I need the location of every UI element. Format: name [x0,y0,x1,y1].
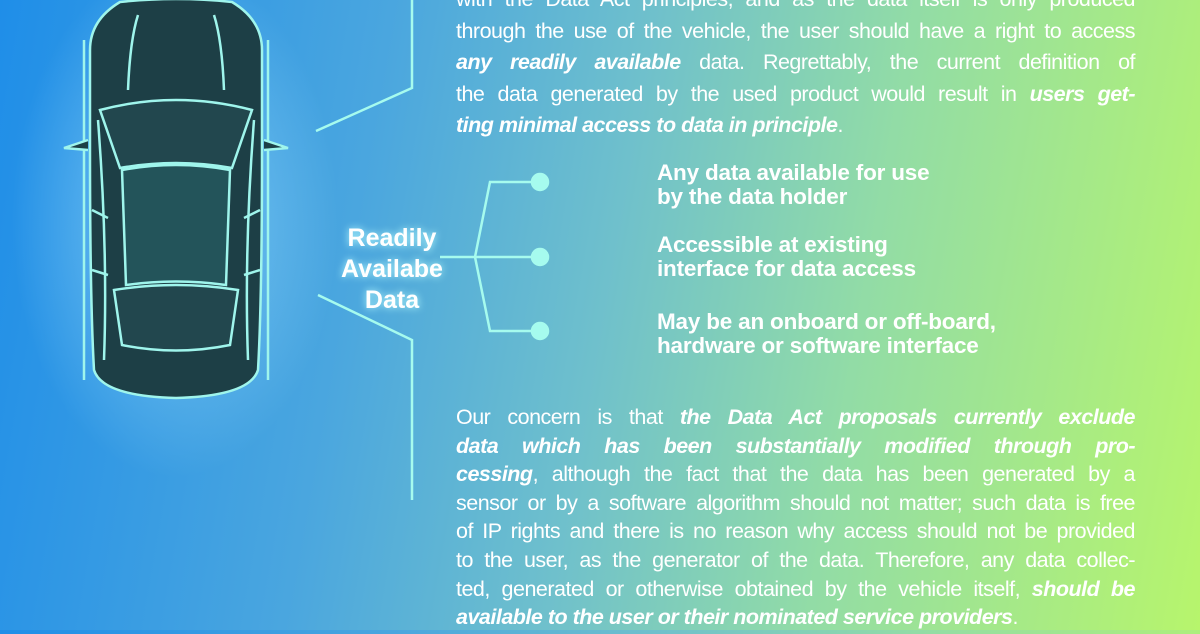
item 1: by the data holder [657,184,847,209]
heading: readily available data: Data [365,286,419,314]
bottom paragraph: available to the user or their nominated service providers. [456,605,1018,629]
item 3 [657,309,996,358]
bottom paragraph: of IP rights and there is no reason why access should not be provided [456,519,1135,543]
glow behind car [10,0,340,480]
bottom paragraph [456,405,1136,629]
bottom paragraph: Our concern is that the Data Act proposals currently exclude [456,405,1135,429]
bottom paragraph: ted, generated or otherwise obtained by the vehicle itself, should be [456,577,1135,601]
heading: readily available data [338,224,446,314]
car illustration [64,0,288,400]
heading: readily available data: Availabe [341,255,443,283]
top paragraph: any readily available data. Regrettably, the current definition of [456,50,1135,74]
top paragraph: through the use of the vehicle, the user should have a right to access [456,18,1135,42]
connector line bottom [318,295,412,500]
bottom paragraph: to the user, as the generator of the data. Therefore, any data collec- [456,548,1135,572]
bottom paragraph: data which has been substantially modified through pro- [456,434,1135,458]
top paragraph: ting minimal access to data in principle. [456,113,843,137]
item 1: Any data available for use [657,160,929,185]
item 2: interface for data access [657,256,916,281]
top paragraph [456,0,1136,137]
top paragraph: the data generated by the used product would result in users get- [456,82,1135,106]
item 1 [657,160,929,209]
item 3: May be an onboard or off-board, [657,309,996,334]
item 2: Accessible at existing [657,232,888,257]
bottom paragraph: cessing, although the fact that the data has been generated by a [456,462,1135,486]
item 2 [657,232,916,281]
heading: readily available data: Readily [348,224,436,252]
bottom paragraph: sensor or by a software algorithm should not matter; such data is free [456,491,1135,515]
branch diagram [440,174,548,339]
item 3: hardware or software interface [657,333,979,358]
